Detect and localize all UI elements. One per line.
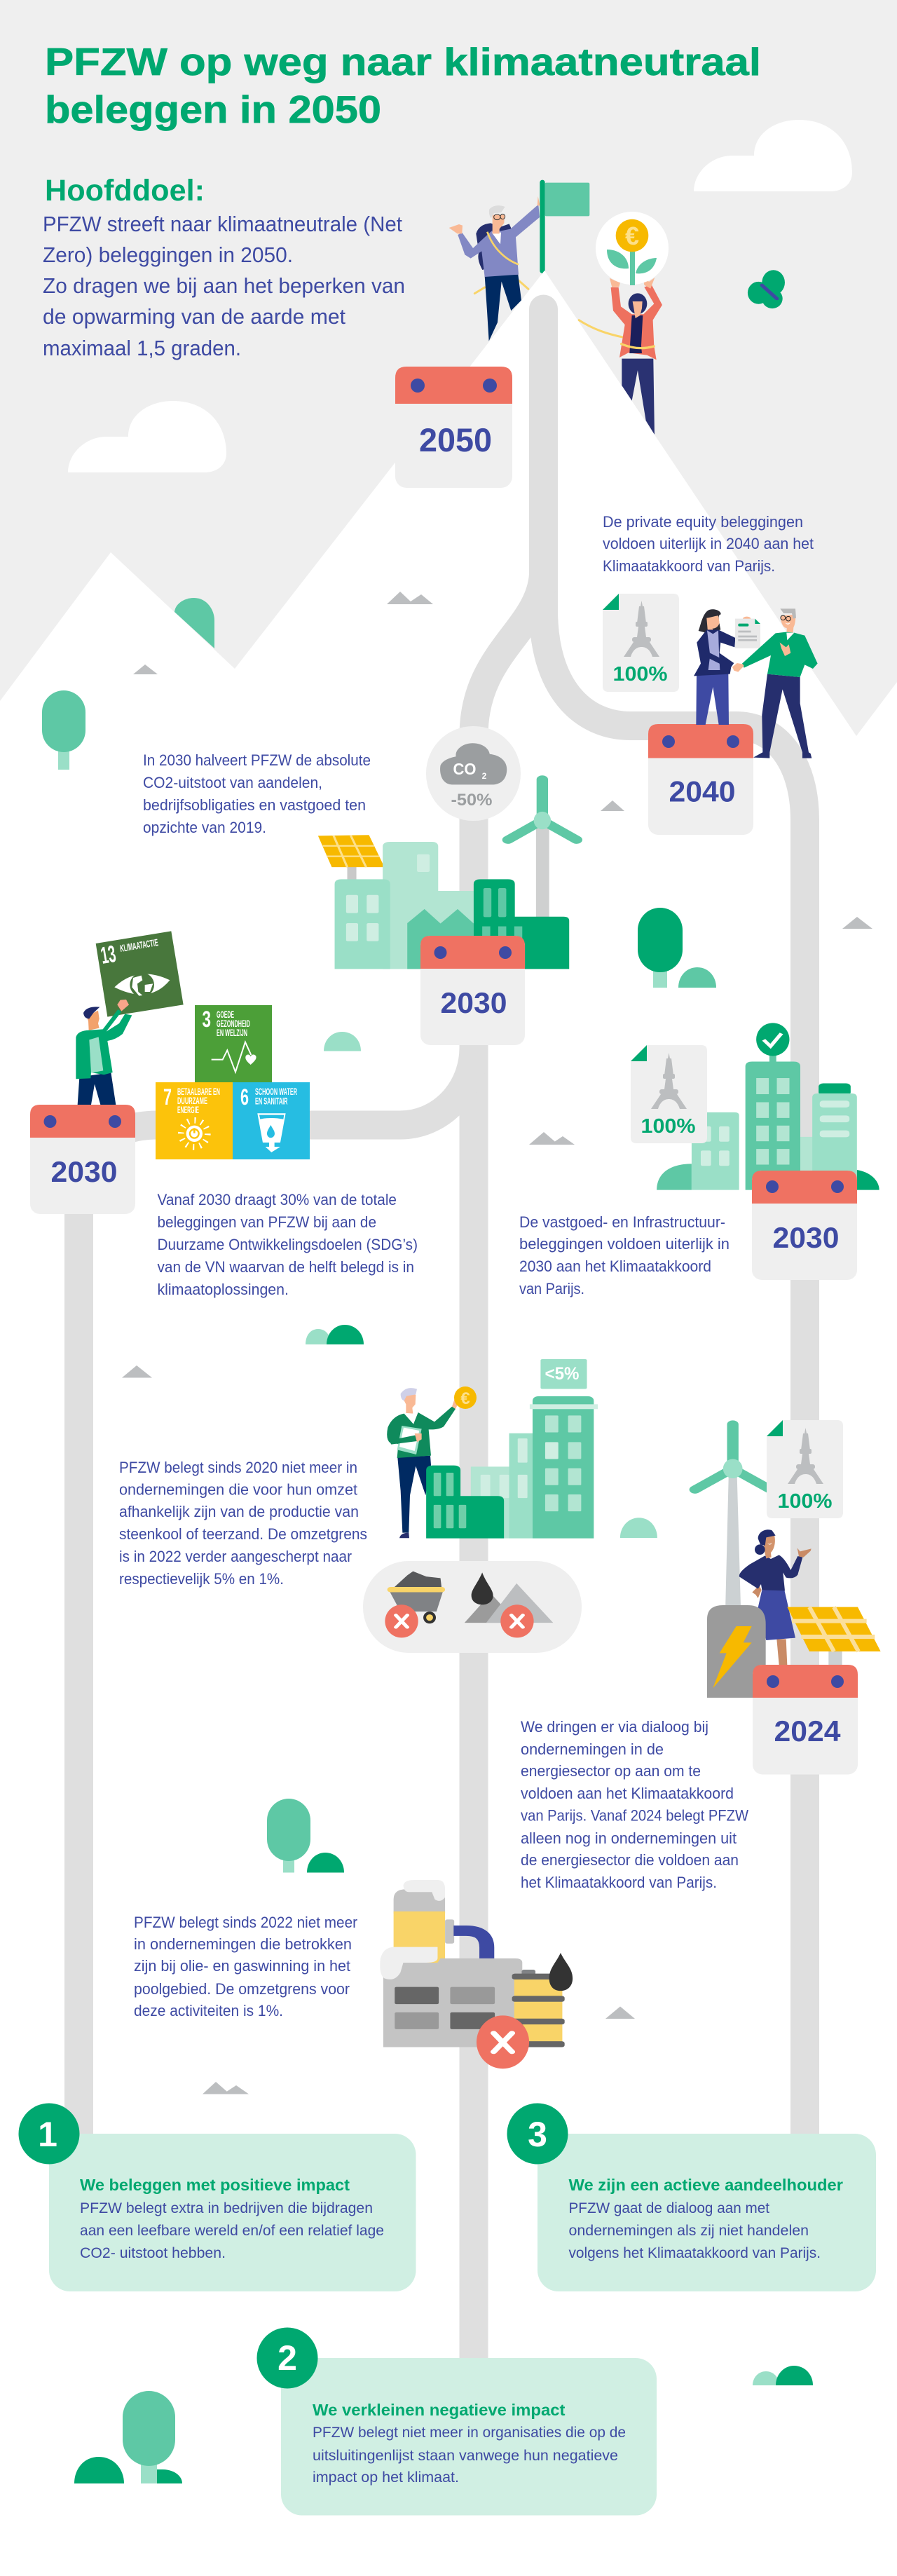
tree right with bush <box>638 908 716 988</box>
calendar 2030 right: 2030 <box>772 1221 840 1254</box>
text: steenkool: ondernemingen die voor hun omzet <box>119 1480 357 1499</box>
butterfly <box>748 270 785 308</box>
card: Paris 100% (2030): 100% <box>641 1115 696 1138</box>
body: CO2- uitstoot hebben. <box>80 2245 226 2261</box>
body: uitsluitingenlijst staan vanwege hun negatieve <box>313 2448 618 2464</box>
number 3 <box>507 2103 568 2165</box>
calendar 2050 <box>395 367 512 488</box>
text: energiesector: het Klimaatakkoord van Parijs. <box>521 1874 717 1891</box>
text: SDG: beleggingen van PFZW bij aan de <box>157 1213 376 1231</box>
tank <box>394 1880 445 1968</box>
tree left <box>42 690 85 770</box>
hidden tree behind mountain <box>174 598 214 648</box>
body: ondernemingen als zij niet handelen <box>569 2223 809 2239</box>
number 1: 1 <box>38 2115 57 2154</box>
barrel <box>512 1970 565 2047</box>
body: volgens het Klimaatakkoord van Parijs. <box>569 2245 821 2261</box>
illustration: city with Paris document <box>657 1023 879 1190</box>
text: halveert CO2: In 2030 halveert PFZW de absolute <box>143 751 371 769</box>
heading: We verkleinen negatieve impact <box>313 2401 566 2419</box>
small mountains upper <box>387 592 433 604</box>
small mountains mid <box>529 1132 575 1145</box>
text: SDG: klimaatoplossingen. <box>157 1281 289 1298</box>
body <box>80 2200 384 2261</box>
text: steenkool: steenkool of teerzand. De omzetgrens <box>119 1525 367 1543</box>
flag <box>540 180 589 273</box>
solar panel <box>318 835 385 882</box>
panel: active shareholder <box>507 2103 876 2291</box>
number 2 <box>256 2327 318 2389</box>
SDG 13: 13 <box>99 941 118 969</box>
text: energiesector: ondernemingen in de <box>521 1740 664 1758</box>
text: vastgoed: beleggingen voldoen uiterlijk in <box>519 1235 730 1253</box>
text: energiesector <box>521 1718 748 1891</box>
check badge <box>756 1023 789 1063</box>
card: Paris 100% (2040): 100% <box>612 663 668 686</box>
title: PFZW op weg naar klimaatneutraal <box>45 40 761 83</box>
main goal text <box>43 212 405 360</box>
panel: positive impact <box>18 2103 416 2291</box>
text: energiesector: van Parijs. Vanaf 2024 belegt PFZW <box>521 1807 748 1824</box>
text: SDG <box>157 1191 418 1298</box>
less than 5 percent sign <box>540 1359 587 1389</box>
rope <box>474 280 528 294</box>
man <box>732 608 818 758</box>
calendar 2024 <box>753 1665 858 1775</box>
cloud top right <box>694 120 852 191</box>
illustration: handshake <box>694 608 818 758</box>
bush pair <box>306 1325 364 1344</box>
woman <box>739 1529 812 1665</box>
text: private equity: voldoen uiterlijk in 2040 aan het <box>603 535 814 552</box>
body <box>569 2200 821 2261</box>
panel: excluded coal and tar sands <box>363 1561 582 1653</box>
main goal text: maximaal 1,5 graden. <box>43 336 241 360</box>
solar panel <box>787 1607 881 1665</box>
SDG 6: SCHOON WATER <box>255 1086 297 1097</box>
hills <box>657 1164 879 1190</box>
tree bottom left <box>74 2391 182 2483</box>
illustration: green city with wind turbine <box>318 779 577 969</box>
power box <box>707 1605 766 1698</box>
oil drop <box>549 1953 573 1991</box>
cross badge <box>477 2015 529 2069</box>
text: SDG: van de VN waarvan de helft belegd is in <box>157 1258 414 1276</box>
panel: SDG goals <box>96 931 310 1159</box>
woman <box>694 609 735 725</box>
road network <box>78 309 804 2383</box>
title: beleggen in 2050 <box>45 88 381 131</box>
calendar 2030 center: 2030 <box>440 986 507 1019</box>
small triangle right <box>605 2006 635 2019</box>
SDG 6: EN SANITAIR <box>255 1095 287 1106</box>
calendar 2024: 2024 <box>774 1715 841 1747</box>
calendar 2030 center <box>420 936 525 1045</box>
text: steenkool <box>119 1459 367 1588</box>
text: poolgebied: deze activiteiten is 1%. <box>134 2002 283 2019</box>
main goal text: Zero) beleggingen in 2050. <box>43 243 293 267</box>
back building <box>383 842 474 969</box>
text: SDG: Vanaf 2030 draagt 30% van de totale <box>157 1191 397 1208</box>
text: poolgebied: zijn bij olie- en gaswinning in het <box>134 1957 350 1975</box>
card: Paris 100% (2024) <box>767 1420 843 1518</box>
calendar 2040 <box>648 724 753 835</box>
cloud left <box>68 401 226 472</box>
card: Paris 100% (2030) <box>631 1045 707 1143</box>
body: PFZW gaat de dialoog aan met <box>569 2200 769 2216</box>
wheelbarrow with coal <box>385 1572 445 1637</box>
SDG 7 <box>156 1082 233 1159</box>
text: vastgoed: De vastgoed- en Infrastructuur- <box>519 1213 725 1231</box>
small triangle near 2040 <box>601 800 624 811</box>
icon: euro plant <box>596 212 669 285</box>
calendar 2030 left <box>30 1105 135 1214</box>
wind turbine <box>508 779 577 941</box>
body: PFZW belegt niet meer in organisaties die op de <box>313 2425 626 2441</box>
text: halveert CO2: CO2-uitstoot van aandelen, <box>143 774 322 791</box>
calendar 2030 left: 2030 <box>50 1155 118 1188</box>
panel: reduce negative impact <box>256 2327 657 2515</box>
text: energiesector: alleen nog in ondernemingen uit <box>521 1829 737 1847</box>
main goal text: Zo dragen we bij aan het beperken van <box>43 273 405 298</box>
oil drop and sand <box>465 1572 553 1637</box>
text: steenkool: PFZW belegt sinds 2020 niet meer in <box>119 1459 357 1476</box>
SDG 7: 7 <box>163 1084 172 1110</box>
text: private equity: De private equity beleggingen <box>603 513 803 531</box>
SDG 3: GOEDE <box>217 1009 234 1020</box>
illustration: man holding SDG 13 <box>76 1000 132 1105</box>
badge: CO2 -50%: -50% <box>451 791 492 810</box>
title <box>45 40 761 131</box>
badge: CO2 -50% <box>426 726 521 821</box>
icon: euro plant: € <box>625 222 639 250</box>
number 3: 3 <box>528 2115 547 2154</box>
euro coin text: € <box>460 1389 470 1408</box>
tree with hill <box>267 1799 344 1873</box>
left building <box>335 879 390 969</box>
label: less than 5 percent: <5% <box>545 1364 579 1384</box>
calendar 2040: 2040 <box>669 775 736 807</box>
text: poolgebied: poolgebied. De omzetgrens voor <box>134 1980 350 1998</box>
card: Paris 100% (2024): 100% <box>778 1490 833 1513</box>
body: impact op het klimaat. <box>313 2469 459 2486</box>
text: steenkool: respectievelijk 5% en 1%. <box>119 1570 284 1588</box>
SDG 7: BETAALBARE EN <box>177 1086 220 1097</box>
text: private equity <box>603 513 814 575</box>
SDG 6 <box>233 1082 310 1159</box>
text: energiesector: voldoen aan het Klimaatakkoord <box>521 1785 734 1802</box>
bush <box>324 1032 361 1051</box>
calendar 2050: 2050 <box>419 421 492 458</box>
main goal text: PFZW streeft naar klimaatneutrale (Net <box>43 212 402 236</box>
building <box>380 1947 522 2047</box>
heading: We beleggen met positieve impact <box>80 2176 350 2194</box>
illustration: wind turbine 2024 <box>695 1424 771 1609</box>
badge: CO2 -50%: 2 <box>482 771 487 781</box>
text: halveert CO2: bedrijfsobligaties en vastgoed ten <box>143 796 366 814</box>
text: energiesector: energiesector op aan om te <box>521 1762 701 1780</box>
text: vastgoed: 2030 aan het Klimaatakkoord <box>519 1258 711 1275</box>
bushes bottom right <box>753 2366 813 2385</box>
text: poolgebied: in ondernemingen die betrokken <box>134 1935 352 1953</box>
text: vastgoed <box>519 1213 730 1297</box>
body <box>313 2425 626 2486</box>
number 2: 2 <box>278 2338 297 2378</box>
small triangle right <box>842 917 872 929</box>
small mountains bottom <box>203 2082 249 2094</box>
SDG 7: DUURZAME <box>177 1095 207 1106</box>
pipe <box>445 1919 487 1963</box>
buildings <box>426 1396 598 1539</box>
legs <box>485 275 521 341</box>
text: poolgebied: PFZW belegt sinds 2022 niet meer <box>134 1914 357 1931</box>
text: poolgebied <box>134 1914 357 2019</box>
head <box>449 196 540 233</box>
factory <box>407 909 474 969</box>
illustration: arctic oil installation <box>380 1880 573 2069</box>
illustration: woman, solar and power <box>707 1529 881 1698</box>
SDG 13 <box>96 931 184 1017</box>
text: private equity: Klimaatakkoord van Parijs. <box>603 557 775 575</box>
illustration: woman holding euro plant <box>578 278 662 435</box>
calendar 2030 right <box>752 1171 857 1280</box>
SDG 6: 6 <box>240 1084 249 1110</box>
body: aan een leefbare wereld en/of een relatief lage <box>80 2223 384 2239</box>
bush <box>620 1518 657 1538</box>
sky background <box>0 0 897 743</box>
badge: CO2 -50%: CO <box>453 760 477 778</box>
illustration: man with coin <box>387 1386 477 1538</box>
illustration: buildings with less than 5 percent <box>426 1359 657 1539</box>
SDG 13: KLIMAATACTIE <box>119 936 159 954</box>
text: steenkool: is in 2022 verder aangescherpt naar <box>119 1548 352 1565</box>
number 1 <box>18 2103 80 2165</box>
text: energiesector: de energiesector die voldoen aan <box>521 1851 739 1869</box>
SDG 7: ENERGIE <box>177 1104 199 1115</box>
small triangle <box>122 1365 152 1378</box>
text: steenkool: afhankelijk zijn van de productie van <box>119 1503 359 1520</box>
text: energiesector: We dringen er via dialoog bij <box>521 1718 708 1736</box>
buildings <box>692 1061 857 1190</box>
SDG 3: EN WELZIJN <box>217 1027 247 1038</box>
main goal text: de opwarming van de aarde met <box>43 304 345 329</box>
SDG 3: 3 <box>202 1007 211 1032</box>
text: halveert CO2: opzichte van 2019. <box>143 819 266 836</box>
heading: Hoofddoel: Hoofddoel: <box>45 174 205 207</box>
sweater <box>458 205 540 277</box>
SDG 3 <box>195 1005 272 1082</box>
text: halveert CO2 <box>143 751 371 836</box>
illustration: climber man with flag <box>449 180 589 341</box>
SDG 3: GEZONDHEID <box>217 1018 250 1029</box>
heading: We zijn een actieve aandeelhouder <box>569 2176 843 2194</box>
backpack <box>476 223 517 270</box>
small triangle <box>133 665 158 674</box>
text: vastgoed: van Parijs. <box>519 1280 584 1297</box>
card: Paris 100% (2040) <box>603 594 679 692</box>
document <box>735 617 760 648</box>
body: PFZW belegt extra in bedrijven die bijdragen <box>80 2200 373 2216</box>
dark factory <box>474 879 569 969</box>
text: SDG: Duurzame Ontwikkelingsdoelen (SDG’s) <box>157 1236 418 1253</box>
